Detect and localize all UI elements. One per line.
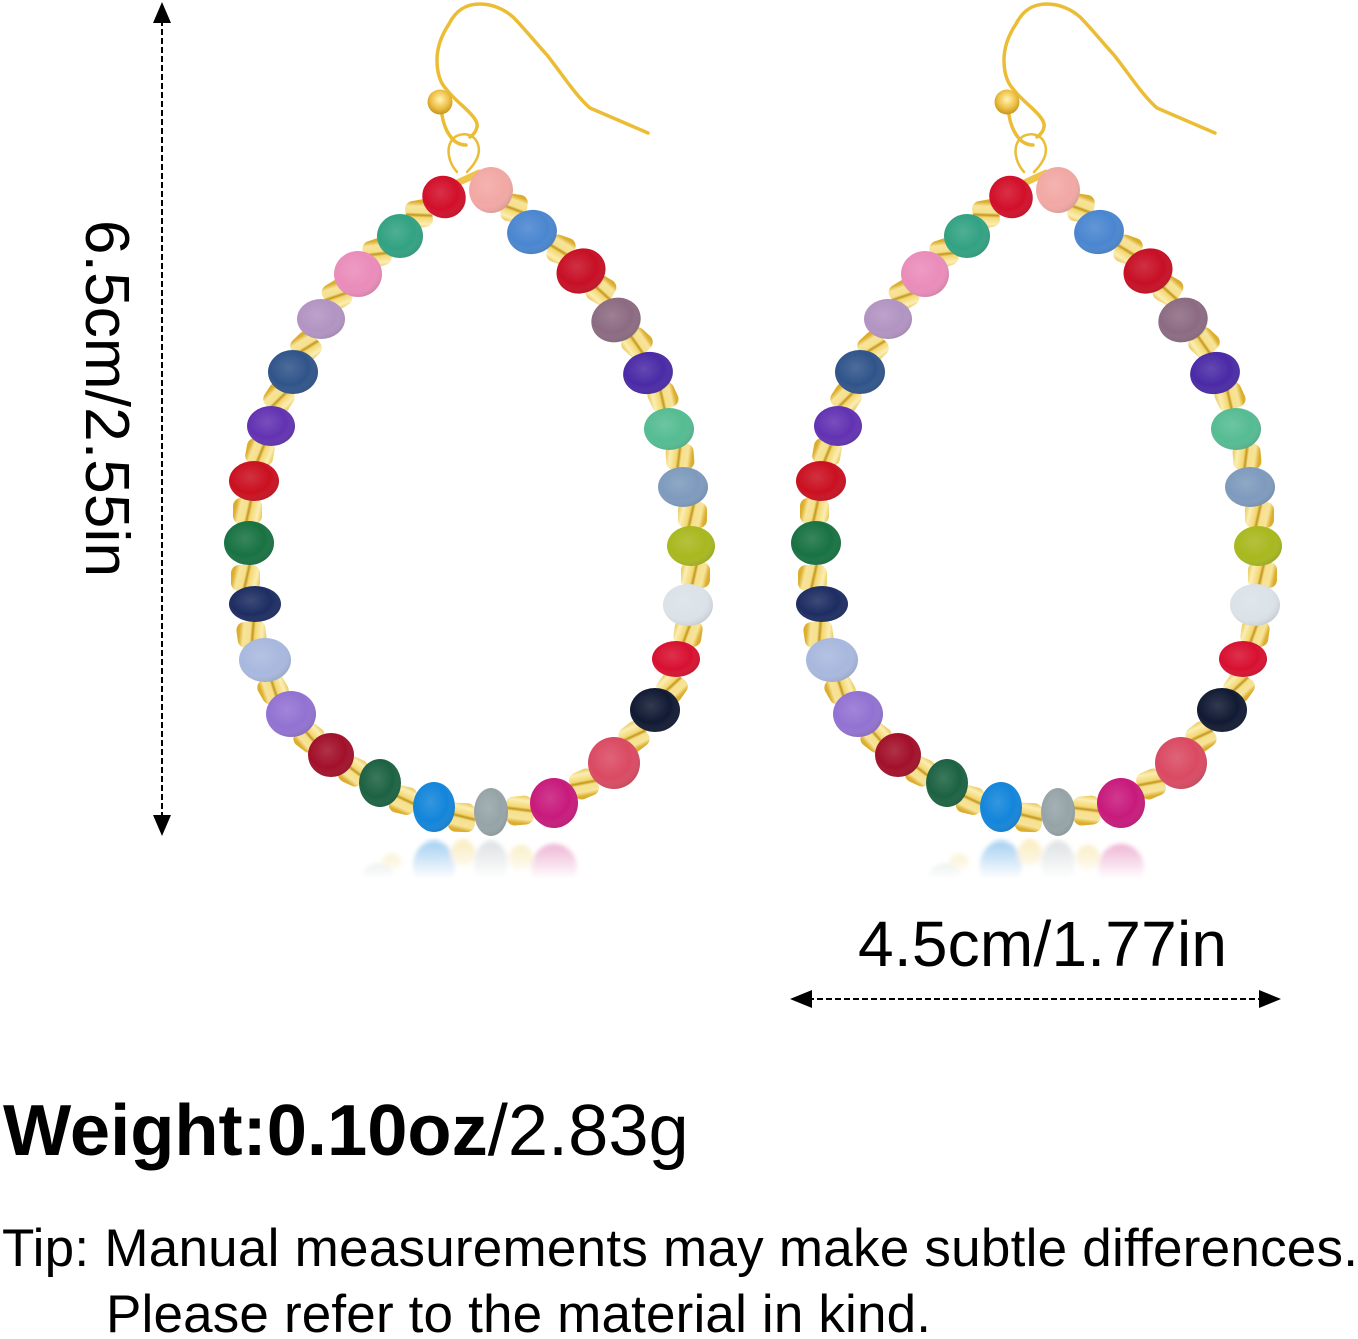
gemstone beads bbox=[224, 167, 715, 836]
width label: 4.5cm/1.77in bbox=[858, 908, 1227, 980]
height label: 6.5cm/2.55in bbox=[72, 220, 141, 577]
weight text: Weight:0.10oz/2.83g bbox=[3, 1091, 689, 1171]
hook bbox=[437, 4, 648, 184]
right earring bbox=[791, 4, 1282, 897]
left earring bbox=[224, 4, 715, 897]
height arrow bbox=[153, 2, 171, 836]
bead shading bbox=[224, 167, 715, 836]
reflection bbox=[350, 840, 590, 897]
hook ball bbox=[428, 90, 452, 114]
width arrow bbox=[790, 990, 1281, 1008]
tip line 1: Tip: Manual measurements may make subtle differences. bbox=[2, 1219, 1358, 1278]
gold spacer beads bbox=[231, 192, 710, 832]
